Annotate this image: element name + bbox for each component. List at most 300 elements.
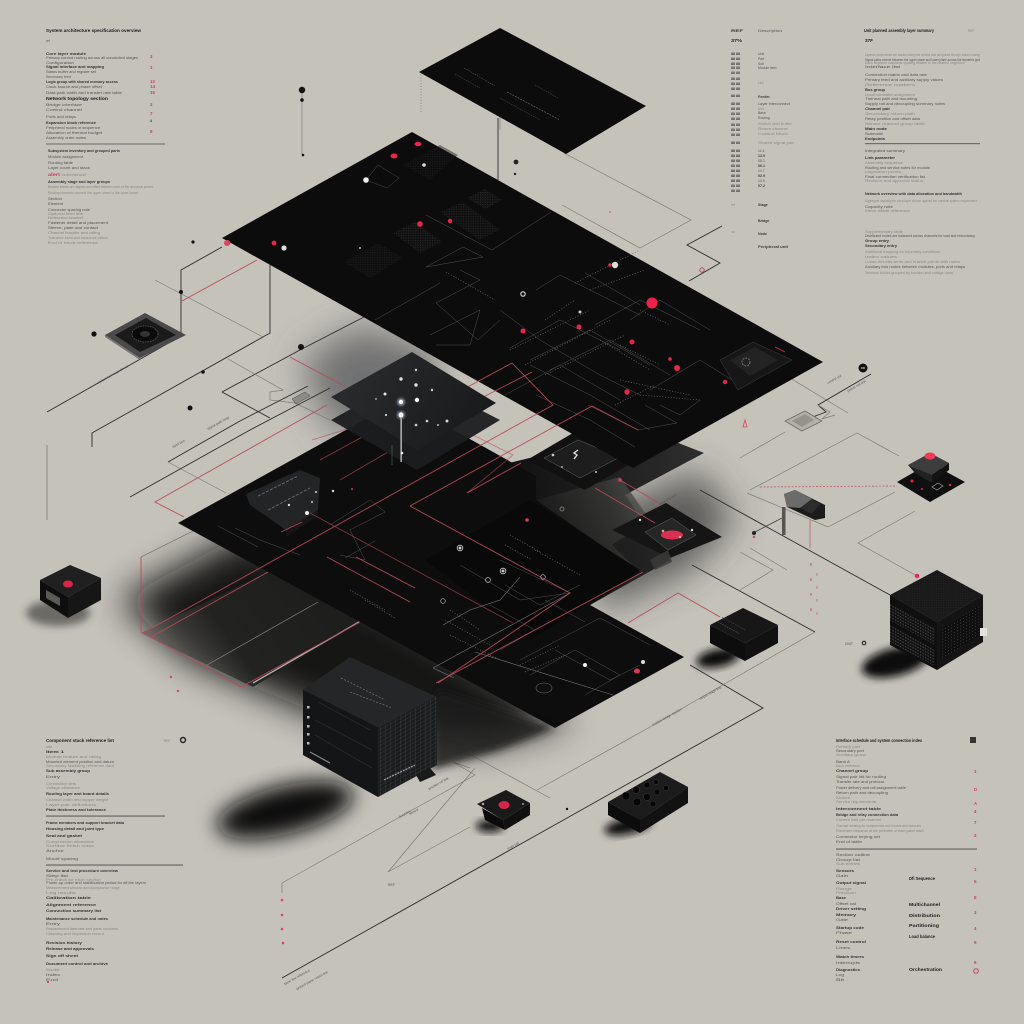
text block: bottom left: Sign off sheet — [46, 953, 79, 958]
text block: bottom left: Connection summary list — [46, 908, 102, 913]
text block: bottom right: Bit — [836, 978, 844, 982]
text block: top center column: 88 88 — [731, 133, 740, 137]
text block: top center column: 88 88 — [731, 184, 740, 188]
text block: bottom right: Return path and decoupling — [836, 791, 888, 795]
text block: bottom left: Replacement intervals and parts numbers — [46, 927, 118, 931]
crystal panel stack — [331, 352, 500, 470]
text block: bottom left: Anchor — [46, 849, 65, 853]
text block: top left: ref — [46, 39, 50, 43]
text block: top left: Network topology section — [46, 96, 108, 101]
text block: top center column: 88 88 — [731, 87, 740, 91]
text block: top left: Clock source and phase offset — [46, 85, 102, 89]
text block: bottom left: Calibration table — [46, 895, 92, 900]
text block: bottom right: Group list — [836, 858, 860, 862]
black and red marker dots — [91, 87, 866, 944]
inline callouts along connectors: output stage line — [699, 685, 722, 701]
text block: bottom right: Offset val — [836, 902, 856, 906]
text block: top center column: REF — [731, 28, 744, 33]
text block: bottom left: Entry — [46, 775, 61, 779]
text block: top center column: 14.7 — [758, 169, 765, 173]
text block: bottom right: 4 — [974, 926, 977, 931]
text block: top center column: 11.4 — [758, 149, 764, 153]
soft shadows beneath layers — [26, 325, 931, 850]
text block: top left: 1 — [150, 65, 153, 70]
text block: bottom right: Service requirements — [836, 800, 877, 804]
screen module in lower panel — [246, 470, 353, 537]
text block: bottom right: Thermal derating for components and boards and modules — [836, 824, 921, 828]
text block: bottom left: Entry — [46, 922, 61, 926]
text block: top left: Section — [48, 197, 62, 201]
text block: bottom left: Mounted element position and datum — [46, 760, 114, 764]
text block: bottom right: Sensors — [836, 868, 855, 873]
text block: top left: Ports and relays — [46, 115, 76, 119]
text block: top right: Supplementary table — [865, 230, 903, 234]
text block: top left: Control channel — [46, 108, 82, 112]
text block: top right: Local controller assignment — [865, 93, 915, 97]
text block: top right: Sensor readout group table — [865, 122, 925, 126]
connector lines: outer schematic — [47, 72, 917, 978]
text block: bottom right: Gate — [836, 918, 848, 922]
text block: bottom right: A — [974, 801, 978, 806]
text block: top right: Each segment maintains spacing relative to the nearest neighbour — [865, 61, 966, 65]
text block: top center column — [731, 28, 795, 249]
text block: bottom right: 7 — [974, 820, 977, 825]
lower panel — [178, 400, 684, 728]
text block: top center column: 06.1 — [758, 164, 765, 168]
text block: top center column: Node — [758, 232, 767, 236]
text block: top right: Integrated summary — [865, 149, 905, 153]
text block: bottom right: Precision — [836, 891, 856, 895]
text block: top center column: Part — [758, 57, 764, 61]
text block: bottom left: Maintenance schedule and notes — [46, 916, 109, 921]
text block: bottom right: Reset control — [836, 939, 866, 944]
text block: top center column: 88 88 — [731, 94, 740, 98]
text block: top center column: 37% — [731, 38, 742, 43]
text block: top center column: Module item — [758, 66, 777, 70]
text block: bottom right: 9 — [974, 940, 977, 945]
inline callouts along connectors: main rail — [507, 841, 520, 851]
text block: bottom left: Service and test procedure overview — [46, 868, 119, 873]
text block: top left: 2 — [150, 102, 153, 107]
text block: bottom right: Section outline — [836, 853, 870, 857]
upper panel nodes — [224, 142, 727, 395]
text block: top right: Routing and service notes for module — [865, 166, 930, 170]
middle black box — [710, 608, 778, 661]
text block: bottom right: Gain — [836, 874, 848, 878]
text block: top left: Allocation of thermal budget — [46, 131, 102, 135]
text block: top right: Unit planned assembly layer summary — [864, 28, 934, 33]
text block: top center column: Bridge — [758, 219, 769, 223]
text block: top center column: Base — [758, 111, 766, 115]
text block: top right: Group entry — [865, 238, 890, 243]
text block: bottom left: Measurement window and acceptance range — [46, 886, 120, 890]
text block: bottom left: Compression allowance — [46, 840, 94, 844]
text block: top center column: Switch and buffer — [758, 122, 793, 126]
text block: top center column: 88 88 — [731, 77, 740, 81]
text block: bottom left: Module feature and rating — [46, 755, 101, 759]
text block: top left: Fastener detail and placement — [48, 221, 108, 225]
text block: top left: Tolerance band and clearance values — [48, 236, 108, 240]
text block: bottom right: Watch timers — [836, 954, 865, 959]
text block: bottom right: Dfi Sequence — [909, 876, 935, 881]
text block: bottom left: Log results — [46, 891, 77, 895]
translucent plate under lower panel — [141, 572, 360, 687]
connector lines: red links outside panels — [155, 260, 897, 620]
text block: top right: Revision and approval status — [865, 179, 924, 183]
text block: bottom left: Index — [46, 973, 61, 977]
upper panel device — [720, 342, 792, 390]
text block: top left — [46, 28, 165, 245]
text block: top center column: 88 88 — [731, 107, 740, 111]
camera device — [752, 490, 825, 538]
text block: top center column: 88 88 — [731, 112, 740, 116]
text block: bottom right: D — [974, 787, 977, 792]
text block: top left: Assembly order notes — [46, 136, 86, 140]
text block: bottom right: Log — [836, 973, 844, 977]
text block: top left: 15 — [150, 90, 155, 95]
text block: top right: Capacity note — [865, 205, 893, 209]
text block: top center column: 88 88 — [731, 123, 740, 127]
text block: bottom right: Power delivery and rail assignment table — [836, 786, 906, 790]
text block: top right: Link parameter — [865, 155, 895, 160]
inline callouts along connectors: data channel — [659, 493, 678, 506]
inline callouts along connectors: sensor — [409, 807, 420, 816]
main upper panel — [222, 132, 823, 468]
text block: bottom right: Diagnostics — [836, 967, 861, 972]
left red box — [40, 565, 101, 618]
text block: top left: Secondary feed — [46, 75, 71, 79]
text block: bottom right: 3 — [974, 910, 977, 915]
black button device — [608, 772, 688, 833]
text block: bottom right: Transfer rate and protocol — [836, 780, 884, 784]
text block: top center column: no — [731, 230, 735, 234]
inline callouts along connectors: REF — [388, 883, 395, 887]
text block: top left: Data path width and transfer rate table — [46, 91, 122, 95]
text block: bottom right: Bridge and relay connection data — [836, 812, 899, 817]
text block: bottom right: Notes — [836, 796, 851, 800]
text block: bottom right: Sub entries — [836, 862, 861, 866]
text block: top center column: 10.5 — [758, 179, 765, 183]
text block: bottom left: Revision history — [46, 940, 83, 945]
text block: bottom right: Startup code — [836, 925, 865, 930]
text block: bottom left: End — [46, 978, 58, 982]
text block: top left: Logic group with shared memory access — [46, 79, 119, 84]
text block: bottom right: Multichannel — [909, 902, 940, 907]
text block: bottom right: Bank A — [836, 760, 851, 764]
text block: top left: 14 — [150, 84, 155, 89]
text block: top left: Configuration — [46, 61, 74, 65]
text block: top center column: 88 88 — [731, 57, 740, 61]
text block: bottom left: Sub assembly group — [46, 768, 91, 773]
text block: top right: Bus group — [865, 87, 886, 92]
text block: top right: Relay position and offset data — [865, 117, 920, 121]
text block: bottom left: Document control and archive — [46, 961, 109, 966]
lower panel circuit traces — [207, 500, 650, 695]
text block: top center column: 12.0 — [758, 154, 765, 158]
inline callouts along connectors: control out — [827, 374, 842, 385]
text block: top right: Aggregate capacity for each layer shown against the nominal system requirement — [865, 199, 977, 203]
text block: bottom right — [836, 737, 978, 982]
text block: top right: Channel pair — [865, 106, 890, 111]
top floating panel — [419, 28, 646, 154]
text block: bottom left: Item 1 — [46, 749, 65, 754]
text block: bottom left: Surface finish class — [46, 844, 95, 848]
text block: bottom right: Output signal — [836, 880, 866, 885]
text block: top center column: ref — [731, 203, 735, 207]
text block: bottom right: Base — [836, 895, 847, 900]
text block: bottom left: REF — [164, 739, 170, 743]
text block: top center column: 88 88 — [731, 149, 740, 153]
text block: top center column: 88 88 — [731, 117, 740, 121]
text block: bottom right: Auxiliary group — [836, 753, 866, 757]
text block: top center column: Control block — [758, 132, 789, 136]
gray step plate beside chip module — [530, 477, 650, 605]
text block: top right: Secondary return path — [865, 112, 915, 116]
text block: bottom right: Load balance — [909, 934, 935, 939]
text block: top left: alert — [48, 172, 61, 177]
text block: top right: Index values — [865, 255, 898, 259]
inline callouts along connectors: feed line — [399, 809, 412, 819]
text block: bottom right: Range — [836, 887, 852, 891]
text block: bottom right: Bank reference — [836, 764, 860, 768]
text block: top center column: 88 88 — [731, 159, 740, 163]
text block: top center column: Unit — [758, 52, 764, 56]
text block: top right: Final connection verification list — [865, 175, 925, 179]
text block: top center column: Description — [758, 29, 782, 33]
lower panel dim strip at bottom — [432, 690, 555, 770]
text block: bottom left: Channel width and copper weight — [46, 798, 108, 802]
text block: bottom right: Partitioning — [909, 923, 939, 928]
text block: bottom left: Secondary fastening reference data — [46, 764, 114, 768]
text block: top center column: 88 88 — [731, 62, 740, 66]
text block: top center column: 88 88 — [731, 102, 740, 106]
text block: bottom right: Orchestration — [909, 967, 942, 972]
inline callouts along connectors: module bridge section — [652, 707, 683, 727]
lower panel dotted text marks — [350, 535, 580, 672]
text block: bottom right: End of table — [836, 840, 862, 844]
text block: top center column: 88 88 — [731, 52, 740, 56]
top-right device on red panel — [897, 452, 965, 502]
text block: top right: Connection matrix and data rate — [865, 73, 927, 77]
text block: top center column: 88 88 — [731, 164, 740, 168]
text block: top center column: 07.2 — [758, 184, 765, 188]
inline callouts along connectors — [97, 364, 867, 991]
gray back panel on the right — [480, 430, 704, 605]
inline callouts along connectors: base line reference — [284, 968, 311, 986]
text block: top right: Secondary entry — [865, 243, 898, 248]
text block: top left: Primary control routing across all connected stages — [46, 56, 138, 60]
text block: top left: System architecture specification overview — [46, 28, 141, 33]
text block: top right: Primary feed and auxiliary supply values — [865, 78, 943, 82]
text block: bottom right: Interconnect table — [836, 806, 882, 811]
text block: top right: Network overview with data allocation and bandwidth — [865, 191, 963, 196]
text block: top right — [864, 28, 980, 275]
text block: top left: Subsystem inventory and grouped parts — [48, 148, 121, 153]
text block: bottom left: Component stack reference list — [46, 738, 114, 743]
text block: bottom left: Seal and gasket — [46, 833, 83, 838]
left mounting plate device — [105, 313, 186, 360]
text block: top left: Bridge interface — [46, 103, 82, 107]
text block: top right: Main node — [865, 126, 888, 131]
schematic icon: right component outline — [785, 364, 868, 431]
text block: bottom right: Current limit per channel — [836, 818, 881, 822]
text block: bottom right: Driver setting — [836, 906, 867, 911]
text block: top center column: Link — [758, 81, 764, 85]
large black server cube — [890, 570, 987, 670]
text block: bottom left: Power-up order and stabilisation period for all the layers — [46, 881, 146, 885]
text block: top left: tolerance — [62, 173, 86, 177]
text block: top right: 37F — [865, 38, 873, 43]
text block: top center column: Shared signal pair — [758, 141, 795, 145]
text block: bottom right: 5 — [974, 879, 977, 884]
red routing lines across panels — [141, 363, 720, 687]
text block: top center column: Sub — [758, 62, 764, 66]
text block: top right: Additional mapping for boundary conditions — [865, 250, 940, 254]
text block: top left: End of block reference — [48, 241, 98, 245]
text block: top right: Thermal path and mounting — [865, 97, 917, 101]
text block: top center column: Unit — [758, 107, 764, 111]
text block: top right: REF — [968, 29, 974, 33]
text block: bottom left: Connection sets — [46, 782, 77, 786]
inline callouts along connectors: signal path relay — [207, 415, 230, 431]
text block: top left: Core layer module — [46, 51, 87, 56]
text block: bottom right: 8 — [974, 895, 977, 900]
text block: bottom right: Phase — [836, 931, 852, 935]
text block: bottom right: 4 — [974, 809, 977, 814]
text block: top center column: Layer interconnect — [758, 102, 790, 106]
text block: top left: Connector spacing note — [48, 208, 90, 212]
large data cube — [303, 657, 437, 797]
inline callouts along connectors: ground plane return line — [296, 970, 329, 991]
text block: top left: Assembly stage and layer groups — [48, 179, 111, 184]
text block: top center column: 88 88 — [731, 154, 740, 158]
text block: top left: 4 — [150, 119, 152, 123]
text block: top center column: Stage — [758, 203, 768, 207]
text block: top center column: Peripheral unit — [758, 245, 789, 249]
text block: bottom right: Signal pair list for routing — [836, 775, 886, 779]
text block: top right: Endpoints — [865, 136, 886, 141]
text block: top center column: 88 88 — [731, 141, 740, 145]
text block: top center column: 88 88 — [731, 66, 740, 70]
inline callouts along connectors: UNIT — [845, 642, 853, 646]
text block: top center column: 88 88 — [731, 128, 740, 132]
text block: top left: 9 — [150, 129, 153, 134]
text block: bottom left: Plate thickness and tolerance — [46, 807, 107, 812]
text block: top center column: Routing — [758, 116, 770, 120]
inline callouts along connectors: system link node 04 ref — [97, 364, 129, 385]
text block: top left: Element — [48, 202, 63, 206]
text block: top right: Subnode — [865, 132, 883, 136]
red cluster panel — [560, 478, 722, 570]
text block: top left: 7 — [150, 111, 153, 116]
text block: bottom right: 1 — [974, 769, 977, 774]
text block: bottom right: 6 — [974, 960, 977, 965]
text block: top left: Routing table — [48, 161, 73, 165]
text block: bottom left: Alignment reference — [46, 902, 97, 907]
inline callouts along connectors: input bus — [172, 439, 186, 449]
text block: bottom left: Voltage allowance — [46, 786, 80, 790]
text block: top left: Signal interface and mapping — [46, 64, 105, 69]
text block: top center column: 08.3 — [758, 159, 765, 163]
text block: bottom right: Interface schedule and system connection index — [836, 738, 922, 743]
text block: top right: Inspection points — [865, 170, 902, 174]
top floating panel content — [455, 68, 560, 120]
text block: top left: Reference bracket — [48, 216, 83, 220]
text block: top center column: 88 88 — [731, 189, 740, 193]
text block: bottom right: Placement clearance at the perimeter of each panel stack — [836, 829, 924, 833]
text block: top left: Bonded sheets are aligned and offset between each of the structural planes — [48, 185, 153, 189]
text block: top right: Signal paths extend between the upper plane and lower plane across the isometric grid — [865, 58, 980, 62]
text block: top right: Reference markers — [865, 83, 916, 87]
text block: top right: Assembly sequence — [865, 161, 903, 165]
chip module on gray panel — [527, 430, 640, 490]
text block: top right: Distributed nodes are balanced across channels for load and redundancy — [865, 234, 975, 238]
text block: top left: Optional feed line — [48, 212, 83, 216]
text block: top center column: 88 88 — [731, 82, 740, 86]
text block: bottom left: Mount spacing — [46, 857, 78, 861]
text block: top left: Channel lengths and rating — [48, 231, 100, 235]
text block: bottom right: Memory — [836, 912, 857, 917]
text block: bottom right: Interrupts — [836, 961, 861, 965]
text block: top left: 3 — [150, 54, 153, 59]
text block: bottom right: Secondary port — [836, 749, 864, 753]
text block: bottom left: Cleaning and inspection record — [46, 932, 104, 936]
text block: bottom left: Frame members and support bracket data — [46, 820, 125, 825]
text block: top right: Interface list — [865, 65, 900, 69]
text block: bottom left — [46, 738, 186, 983]
text block: top right: Lower tier elements and branch points with notes — [865, 260, 961, 264]
small red-topped box — [477, 790, 530, 830]
text block: top right: Supply rail and decoupling summary notes — [865, 102, 945, 106]
text block: top left: Sleeve, plate and contact — [48, 226, 98, 230]
text block: top center column: Return channel — [758, 127, 788, 131]
text block: bottom right: Channel group — [836, 768, 869, 773]
text block: top right: Layered components are stacked along the vertical axis and joined through shared routing — [865, 53, 980, 57]
text block: bottom right: 2 — [974, 833, 977, 838]
text block: bottom left: Release and approvals — [46, 946, 95, 951]
inline callouts along connectors: power rail link — [847, 379, 867, 393]
text block: top left: Peripheral nodes in sequence — [46, 126, 100, 130]
text block: bottom left: Layer pair definitions — [46, 803, 97, 807]
text block: top center column: 88 88 — [731, 179, 740, 183]
text block: bottom right: Lines — [836, 946, 851, 950]
text block: top left: Status buffer and register set — [46, 70, 96, 74]
text block: top left: Expansion block reference — [46, 120, 97, 125]
text block: bottom left: note — [46, 745, 52, 749]
text block: top center column: 88 88 — [731, 71, 740, 75]
text block: top right: Terminal blocks grouped by function and voltage class — [865, 271, 953, 275]
text block: bottom right: Primary port — [836, 745, 860, 749]
text block: bottom left: Step list — [46, 874, 68, 878]
text block: top center column: 02.9 — [758, 174, 765, 178]
text block: bottom right: Connector keying set — [836, 835, 880, 839]
text block: bottom right: Distribution — [909, 913, 940, 918]
text block: bottom right: 1 — [974, 867, 977, 872]
text block: bottom left: Note — [46, 968, 60, 972]
schematic icon: left component outline — [292, 392, 310, 404]
text block: bottom left: Housing detail and joint type — [46, 826, 105, 831]
text block: top left: 12 — [150, 79, 155, 84]
text block: top left: Module assignment — [48, 155, 83, 159]
upper panel circuit blocks — [344, 145, 740, 447]
text block: top center column: Feeder — [758, 95, 770, 99]
inline callouts along connectors: junction ref link — [427, 776, 450, 791]
text block: bottom left: Routing layer and board details — [46, 791, 110, 796]
text block: top left: Layer count and stack — [48, 166, 90, 170]
text block: top center column: 88 88 — [731, 169, 740, 173]
text block: top center column: 88 88 — [731, 174, 740, 178]
text block: top left: Routing channels connect the upper sheet to the lower board — [48, 191, 138, 195]
